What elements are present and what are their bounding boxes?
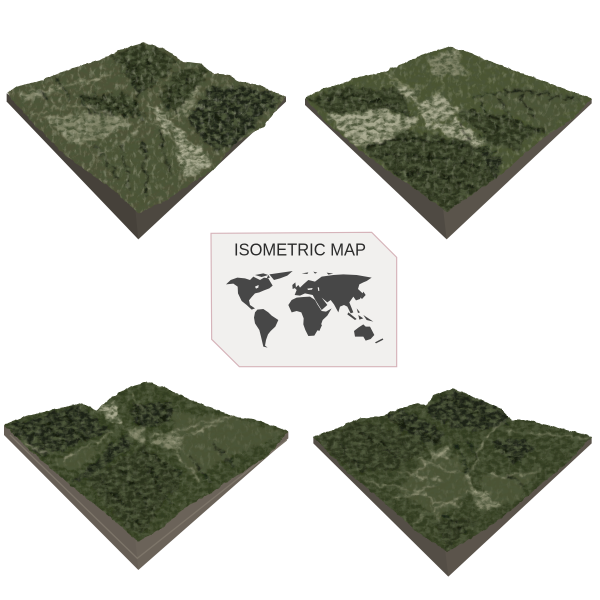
terrain surface (306, 46, 592, 212)
terrain surface (313, 388, 592, 552)
terrain surface (6, 42, 286, 213)
right soil face (133, 432, 288, 570)
terrain block: top right (300, 40, 600, 239)
title: ISOMETRIC MAP (234, 240, 366, 260)
card background (211, 232, 397, 367)
inland seas (255, 285, 319, 291)
right soil face (443, 437, 592, 577)
right soil face (133, 97, 286, 239)
right soil face (442, 98, 592, 239)
left soil face (313, 437, 453, 577)
terrain block: top left (0, 37, 293, 239)
Greenland (269, 271, 293, 280)
terrain block: bottom right (300, 382, 600, 577)
map card (211, 232, 397, 367)
New Zealand (375, 338, 383, 343)
terrain block: bottom left (0, 377, 293, 570)
Eurasia (295, 274, 372, 313)
left soil face (4, 425, 143, 570)
left soil face (305, 98, 452, 239)
Africa (288, 297, 332, 336)
Canadian Arctic islands (255, 273, 270, 278)
Japan (361, 292, 366, 299)
South America (254, 309, 278, 348)
soil strata line (10, 435, 287, 558)
left soil face (7, 93, 143, 239)
North America (226, 277, 273, 310)
Madagascar (317, 324, 322, 331)
Arctic islands of Asia (302, 272, 333, 275)
Australia (354, 324, 374, 341)
Indonesia islands (347, 308, 373, 322)
Great Britain (292, 282, 296, 289)
terrain surface (4, 382, 288, 542)
world map (226, 271, 383, 348)
